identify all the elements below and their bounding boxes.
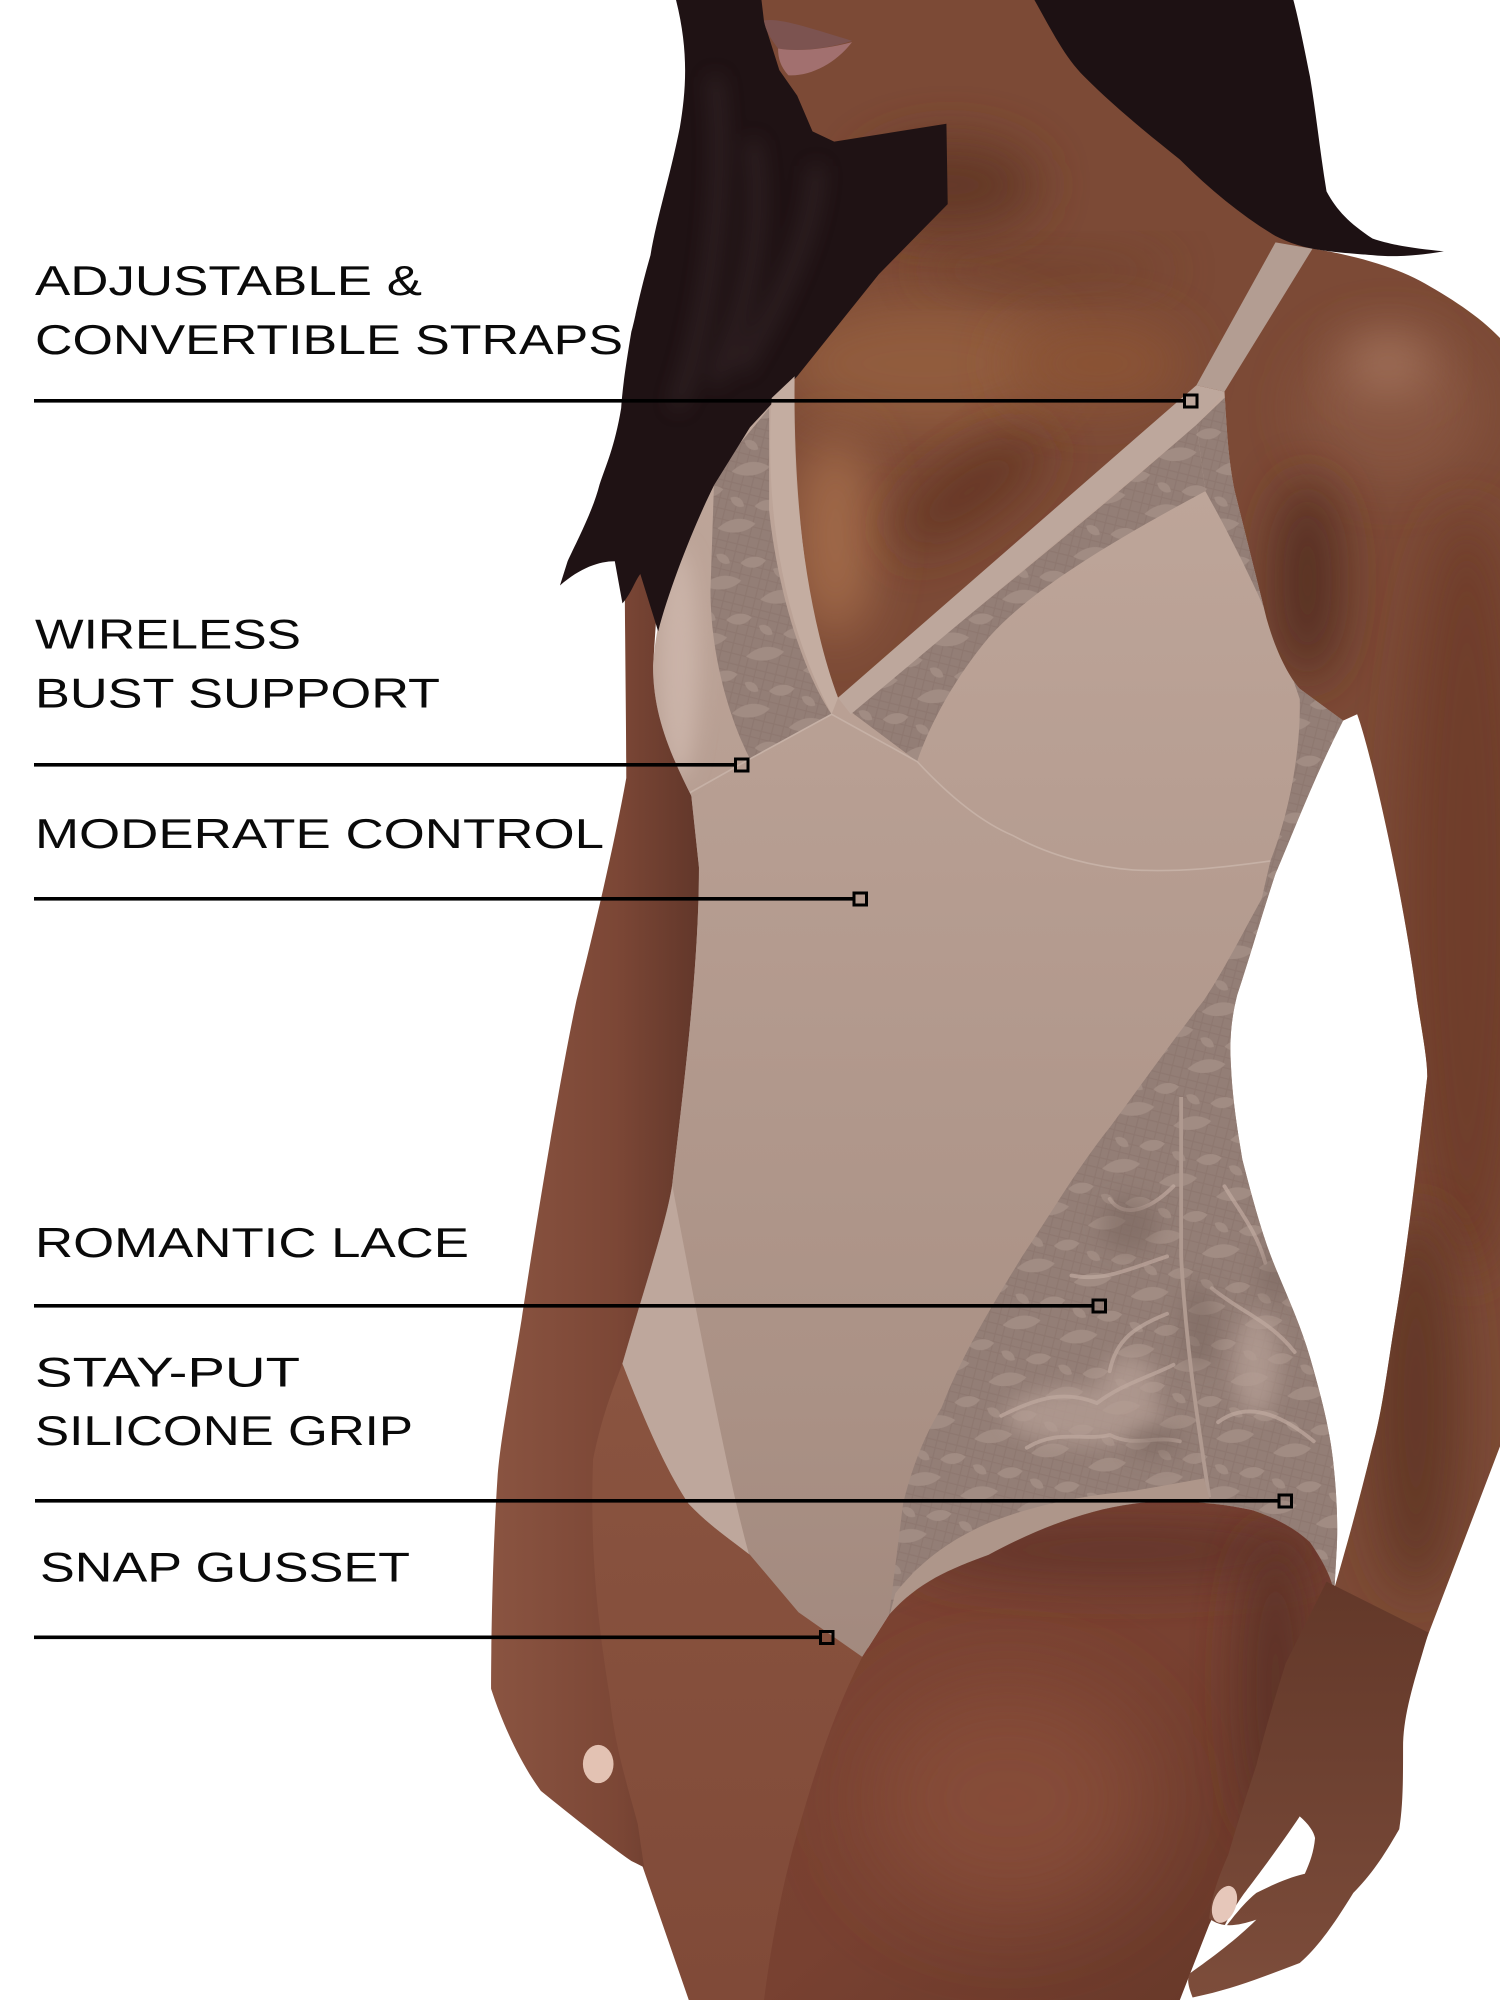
- photo: model wearing lace bodysuit: [491, 0, 1500, 2000]
- fabric light on left side: [658, 548, 699, 778]
- upper lip: [764, 20, 852, 50]
- callout: romantic lace: [34, 1219, 1106, 1312]
- flower cluster: [1005, 1388, 1163, 1444]
- skin base: [762, 0, 1500, 1640]
- side motif: [1233, 1314, 1279, 1416]
- callout: adjustable and convertible straps: [34, 257, 1197, 407]
- patch upper: [1101, 1196, 1157, 1253]
- label: CONVERTIBLE STRAPS: [35, 316, 623, 363]
- lower lip: [778, 42, 852, 75]
- label: ROMANTIC LACE: [35, 1219, 469, 1266]
- lace: left cup: [710, 408, 832, 759]
- marker: [1093, 1300, 1106, 1312]
- label: MODERATE CONTROL: [35, 810, 604, 857]
- hair strands highlight: [676, 77, 816, 408]
- patch right: [1260, 1253, 1284, 1297]
- shading: chest highlight: [784, 300, 1065, 427]
- stems and petals: [1001, 1365, 1173, 1416]
- shading: shoulder base: [1320, 376, 1460, 467]
- right thigh: [753, 1492, 1352, 2000]
- neckline band, right: [838, 385, 1224, 714]
- marker: [1279, 1495, 1292, 1507]
- left leg: [574, 1364, 880, 2000]
- lace: left hip panel: [622, 1186, 749, 1554]
- underbust seam: [689, 714, 1270, 871]
- leader line: [35, 1499, 1279, 1503]
- callout: wireless bust support: [34, 610, 748, 771]
- left arm and hand: [491, 398, 699, 1867]
- thigh highlight: [867, 1684, 1148, 1913]
- leader line: [34, 763, 735, 767]
- neck, chest, right shoulder and right arm: [762, 0, 1500, 1640]
- solid fabric: [599, 357, 1365, 1671]
- label: ADJUSTABLE &: [35, 257, 422, 304]
- patch mid: [1181, 1283, 1217, 1370]
- leader line: [34, 897, 854, 901]
- lace: soft floral glow on hip: [1005, 1314, 1279, 1444]
- leader line: [34, 1636, 820, 1639]
- hair, right side: [1034, 0, 1444, 256]
- patch flower: [1129, 1426, 1180, 1457]
- callout: stay-put silicone grip: [35, 1348, 1292, 1507]
- lace: right neckline: [851, 425, 1205, 761]
- shading: upper right chest: [1072, 324, 1167, 399]
- marker: [736, 759, 748, 771]
- thigh side shadow: [1242, 1531, 1309, 1837]
- shadow: lace mesh dark patches: [1101, 1196, 1291, 1457]
- leader line: [34, 1304, 1093, 1308]
- label: WIRELESS: [35, 610, 301, 658]
- hair, left side: [560, 0, 948, 631]
- neckline band, left: [770, 376, 838, 714]
- gap between fingers: [1221, 1816, 1315, 1934]
- shading: arm: [1403, 510, 1500, 1276]
- shading: cleavage shadow: [882, 428, 1039, 555]
- right hand over thigh: [1188, 1582, 1429, 1997]
- label: SNAP GUSSET: [40, 1544, 410, 1590]
- marker: [854, 893, 866, 905]
- shading: shoulder glow: [1347, 338, 1429, 389]
- nail: [1207, 1882, 1242, 1926]
- lace: side seam: [1181, 1097, 1209, 1497]
- lace: floral line work on hip: [1001, 1186, 1314, 1448]
- marker: [1184, 395, 1197, 407]
- shading: cleavage highlight: [797, 434, 874, 638]
- label: SILICONE GRIP: [35, 1407, 413, 1454]
- flower centre: [1101, 1356, 1157, 1412]
- shading: collarbone shadow: [918, 255, 1173, 286]
- upper leaf sprays: [1071, 1186, 1173, 1371]
- callout: moderate control: [34, 810, 866, 905]
- shading: forearm: [1371, 1212, 1460, 1594]
- lace: armhole, side and hip panel: [889, 395, 1352, 1615]
- marker: [820, 1632, 833, 1644]
- thigh base: [753, 1492, 1352, 2000]
- label: STAY-PUT: [35, 1348, 300, 1396]
- shading: armpit: [1274, 478, 1341, 682]
- shading: neck shadow: [918, 130, 1040, 240]
- left thumb nail: [583, 1745, 614, 1783]
- bodysuit: [599, 357, 1365, 1671]
- shoulder strap: [1196, 242, 1312, 392]
- lips: [764, 20, 852, 75]
- hem band along leg opening: [889, 1478, 1212, 1617]
- thigh top shadow: [906, 1519, 1339, 1580]
- label: BUST SUPPORT: [35, 670, 440, 716]
- right leaf sprays: [1212, 1186, 1314, 1441]
- callout: snap gusset: [34, 1544, 833, 1644]
- hand shape: [1188, 1582, 1429, 1997]
- lower petals: [1027, 1435, 1180, 1448]
- leader line: [34, 399, 1184, 403]
